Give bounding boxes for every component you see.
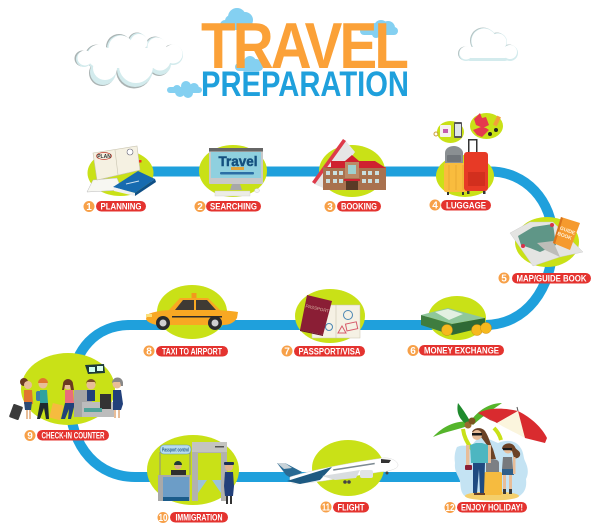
- icon: beach clothes bubble: [470, 113, 503, 139]
- icon: guide book: BOOK: [556, 231, 573, 242]
- label 9: check-in counter: CHECK-IN COUNTER: [42, 431, 105, 442]
- icon: passport backdrop: [295, 289, 365, 343]
- step 1: planning: [87, 146, 156, 196]
- label 4: luggage: 4: [432, 200, 438, 212]
- icon: flight backdrop: [312, 440, 384, 496]
- icon: security gate: [192, 442, 227, 501]
- label 5: map/guide book: [498, 272, 591, 285]
- icon: counter and scale: [74, 379, 114, 417]
- label 10: immigration: IMMIGRATION: [176, 513, 223, 524]
- label 6: money exchange: [408, 345, 504, 357]
- label 3: booking: BOOKING: [341, 202, 377, 213]
- icon: traveller with yellow suitcase: [49, 379, 74, 420]
- step 3: booking: [312, 139, 386, 197]
- label 9: check-in counter: 9: [27, 431, 33, 442]
- icon: yellow suitcase, backpack and red suitcase: [444, 139, 488, 195]
- icon: immigration officer: [224, 462, 234, 504]
- step 4: luggage: [434, 113, 503, 197]
- icon: blue splash background: [455, 437, 528, 500]
- label 7: passport/visa: [282, 346, 365, 358]
- icon: immigration backdrop: [147, 435, 239, 505]
- icon: planning backdrop: [88, 150, 154, 196]
- label 12: enjoy holiday: [444, 502, 527, 514]
- label 4: luggage: LUGGAGE: [446, 201, 486, 212]
- icon: airplane: [277, 458, 398, 484]
- label 7: passport/visa: PASSPORT/VISA: [298, 347, 361, 358]
- icon: luggage backdrop: [436, 155, 494, 197]
- icon: departure board: [85, 364, 105, 374]
- icon: folded map: [510, 222, 583, 266]
- icon: gadgets bubble: [434, 121, 464, 143]
- icon: sand: [465, 492, 519, 500]
- icon: tickets and hotel: [312, 139, 386, 190]
- label 1: planning: 1: [86, 202, 92, 213]
- step 9: check-in counter: [9, 353, 123, 425]
- label 10: immigration: [158, 512, 228, 524]
- icon: palm tree: [433, 403, 502, 449]
- icon: booking backdrop: [319, 145, 385, 197]
- clouds: blue behind title: [167, 8, 398, 98]
- icon: searching backdrop: [199, 145, 267, 197]
- label 6: money exchange: MONEY EXCHANGE: [424, 346, 499, 357]
- icon: traveller with black suitcase: [9, 378, 33, 420]
- label 11: flight: [320, 502, 369, 514]
- label 12: enjoy holiday: ENJOY HOLIDAY!: [461, 503, 523, 514]
- icon: planner and book: PLAN: [97, 154, 111, 160]
- icon: taxi backdrop: [157, 285, 227, 339]
- label 7: passport/visa: 7: [284, 346, 290, 358]
- label 8: taxi to airport: TAXI TO AIRPORT: [162, 347, 222, 358]
- icon: computer monitor: Travel: [218, 153, 258, 169]
- label 9: check-in counter: [24, 430, 109, 442]
- step 8: taxi to airport: [146, 285, 238, 339]
- label 3: booking: [324, 201, 381, 213]
- icon: yellow suitcase and backpack: [484, 459, 502, 495]
- label 1: planning: PLANNING: [100, 202, 142, 213]
- icon: map backdrop: [515, 217, 579, 267]
- icon: guide book: GUIDE: [559, 226, 576, 237]
- icon: passport control booth: Passport control: [162, 448, 189, 454]
- label 2: searching: SEARCHING: [210, 202, 257, 213]
- label 11: flight: FLIGHT: [338, 503, 365, 514]
- step 12: enjoy holiday: [433, 403, 547, 500]
- icon: traveller with backpack: [36, 378, 49, 419]
- icon: yellow taxi: [146, 293, 238, 330]
- step 10: immigration: [147, 435, 239, 505]
- label 11: flight: 11: [322, 502, 330, 514]
- icon: banknote stack and coins: [421, 308, 492, 336]
- icon: woman traveller: [502, 443, 520, 494]
- label 5: map/guide book: MAP/GUIDE BOOK: [516, 274, 587, 285]
- step 11: flight: [277, 440, 398, 496]
- label 12: enjoy holiday: 12: [446, 503, 455, 514]
- icon: man traveller: [465, 428, 496, 495]
- step 7: passport and visa: [295, 289, 365, 343]
- label 8: taxi to airport: [144, 346, 228, 358]
- step 2: searching: [199, 145, 267, 197]
- icon: open visa page: [312, 305, 360, 338]
- label 5: map/guide book: 5: [501, 274, 507, 284]
- label 6: money exchange: 6: [410, 346, 416, 357]
- step 6: money exchange: [421, 296, 492, 340]
- label 8: taxi to airport: 8: [146, 346, 152, 358]
- cloud: large white left: [74, 32, 183, 88]
- label 10: immigration: 10: [158, 513, 168, 524]
- label 3: booking: 3: [327, 202, 333, 213]
- icon: red and white umbrella: [478, 407, 547, 443]
- icon: check-in backdrop: [21, 353, 115, 425]
- icon: airline staff: [112, 378, 123, 418]
- cloud: white right: [458, 28, 518, 61]
- icon: guide book: [553, 217, 580, 250]
- icon: money backdrop: [428, 296, 486, 340]
- label 2: searching: 2: [197, 202, 203, 213]
- title: TRAVEL: [201, 9, 409, 82]
- icon: red passport: PASSPORT: [305, 303, 330, 314]
- step 5: map and guide book: [510, 217, 583, 267]
- label 4: luggage: [430, 200, 491, 212]
- title: PREPARATION: [201, 65, 409, 104]
- label 1: planning: [84, 201, 146, 213]
- route path: [70, 172, 553, 477]
- label 2: searching: [194, 201, 261, 213]
